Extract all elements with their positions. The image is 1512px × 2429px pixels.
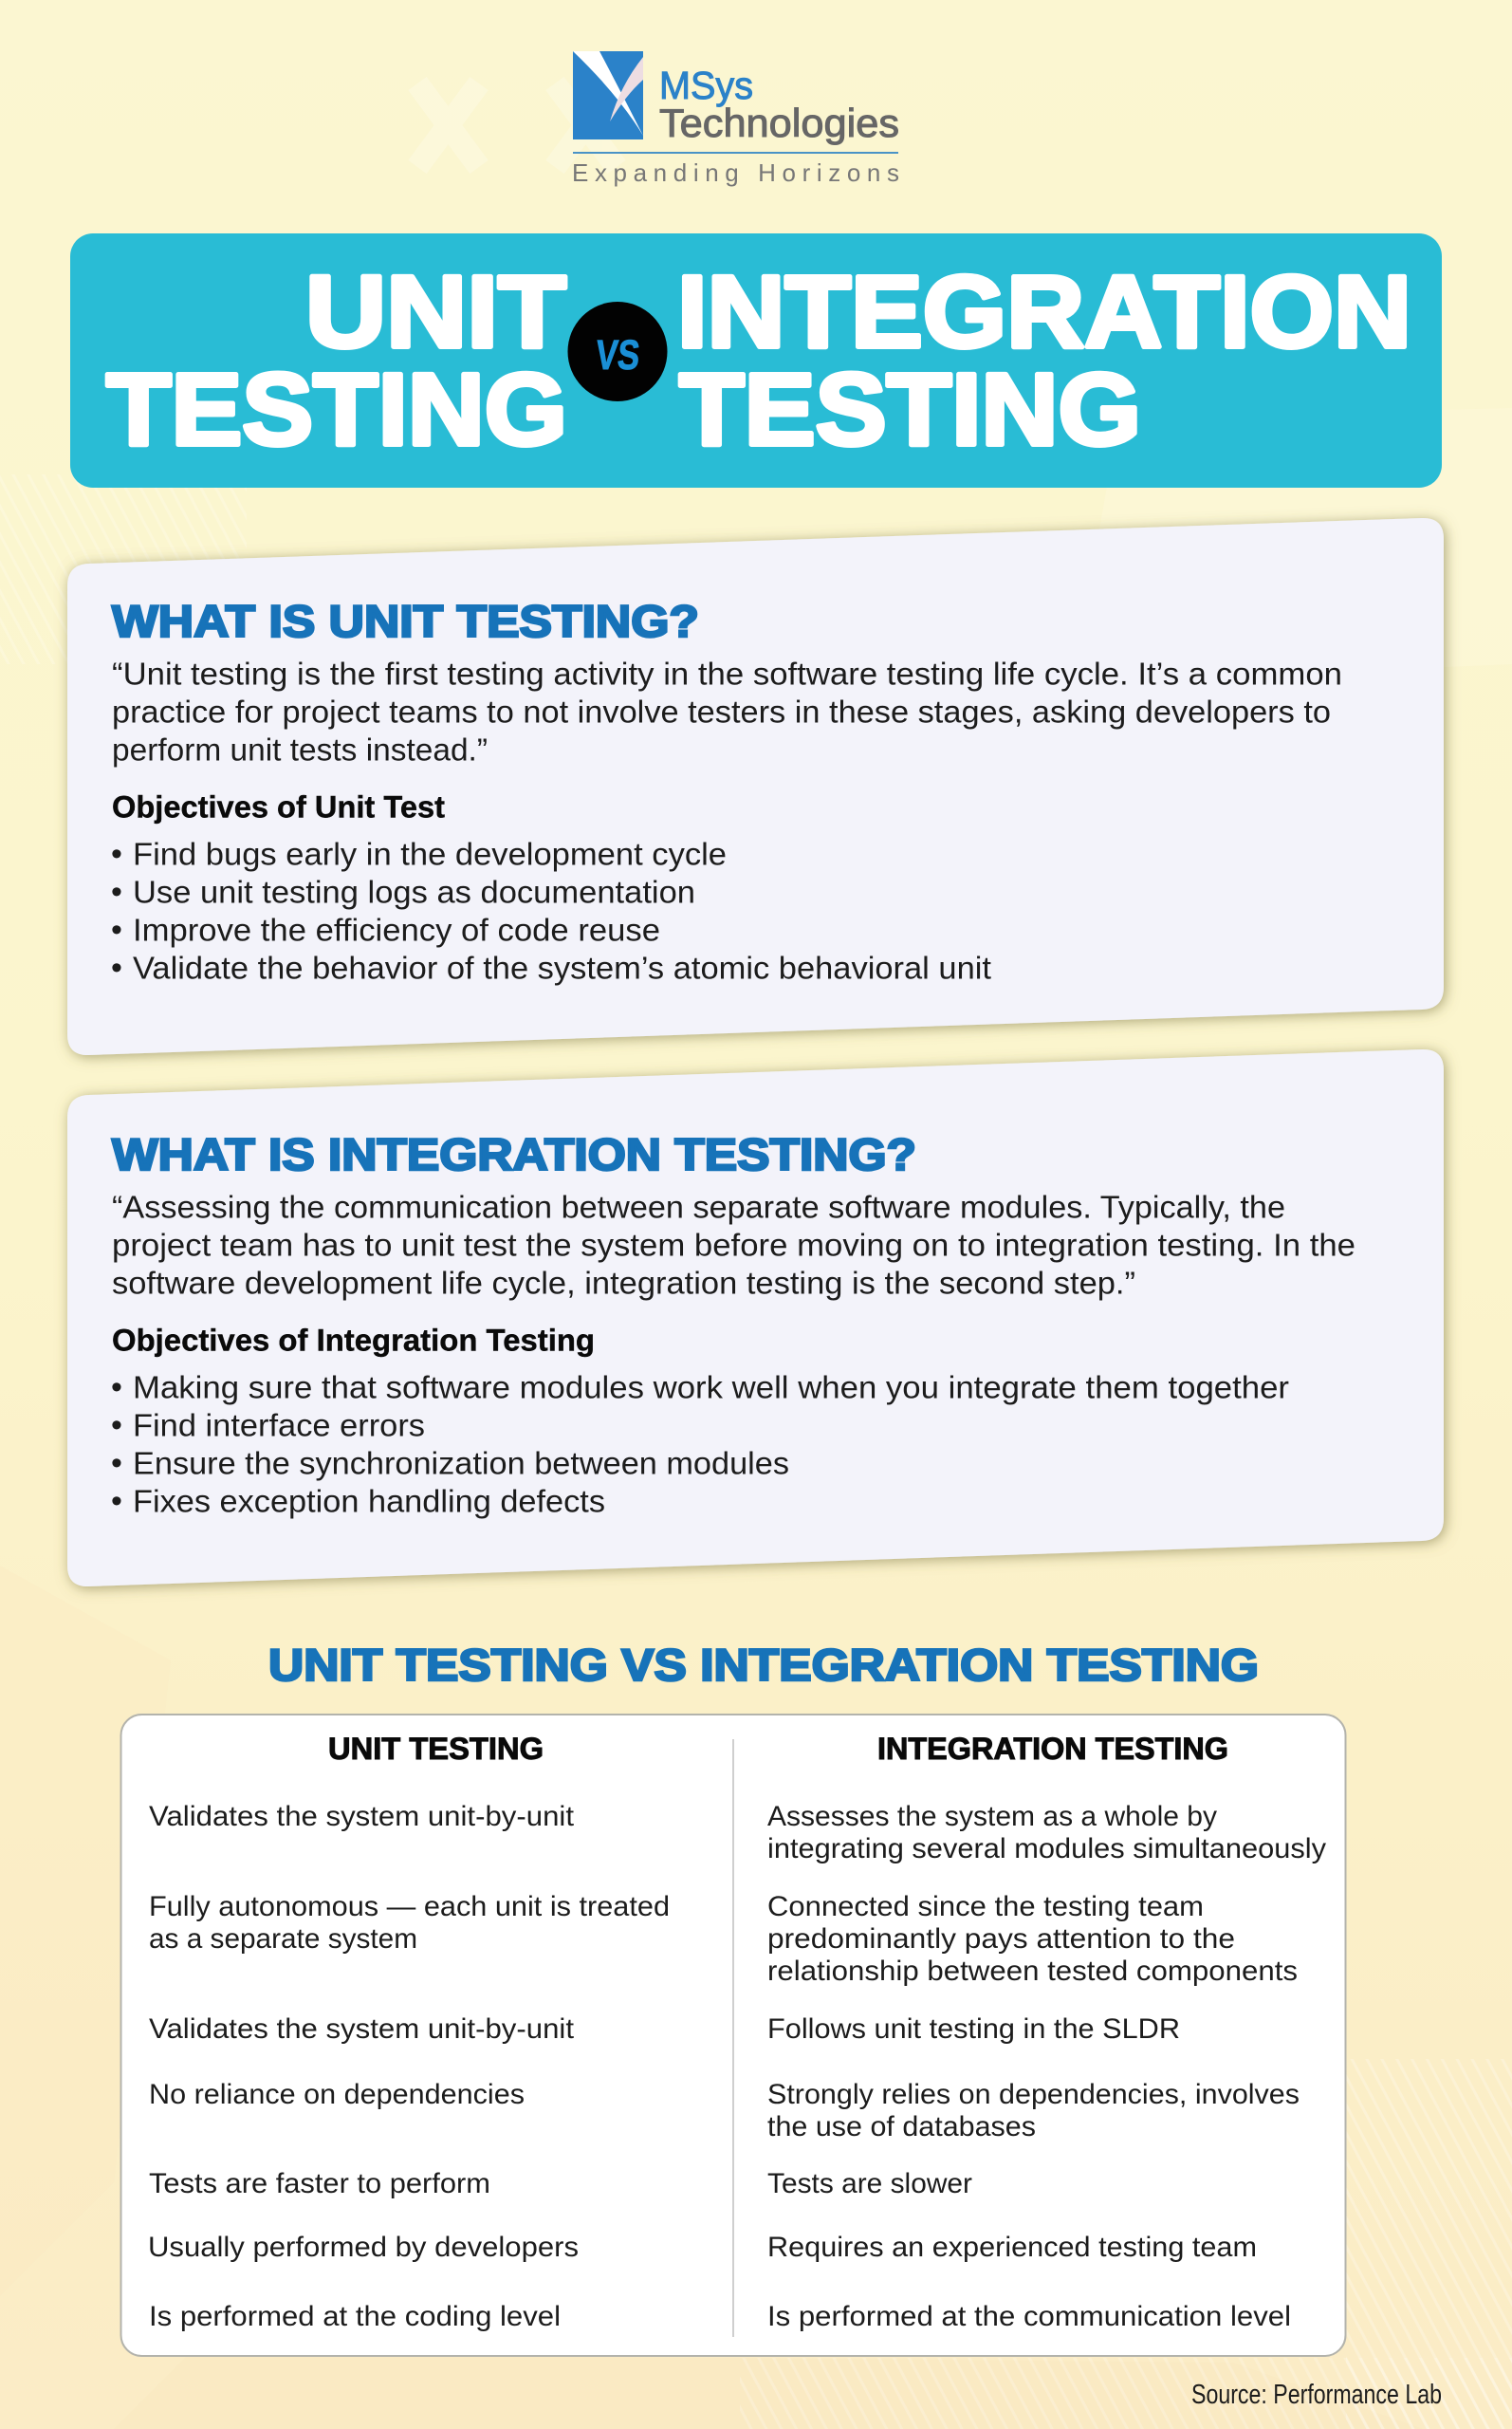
- icon: logo square with swoosh: [573, 51, 643, 139]
- column: integration testing: Is performed at the communication level: [767, 2301, 1291, 2332]
- integration test objectives list: [111, 1369, 1289, 1519]
- integration testing definition: software development life cycle, integration testing is the second step.”: [112, 1266, 1135, 1300]
- comparison table: [121, 1715, 1345, 2356]
- integration testing definition: [112, 1190, 1355, 1300]
- column: integration testing: relationship between tested components: [767, 1956, 1298, 1987]
- unit test objectives list: •: [111, 836, 122, 872]
- column: integration testing: Follows unit testing in the SLDR: [767, 2013, 1180, 2045]
- title: integration testing: TESTING: [679, 351, 1141, 467]
- column: integration testing: INTEGRATION TESTING: [877, 1732, 1228, 1766]
- vs badge: VS: [594, 332, 641, 379]
- column: unit testing: Fully autonomous — each unit is treated: [149, 1891, 670, 1922]
- unit testing definition: [112, 657, 1342, 767]
- vs badge: [567, 302, 668, 401]
- panel: what is unit testing: [67, 518, 1444, 1055]
- subheading: objectives of unit test: Objectives of Unit Test: [112, 789, 445, 824]
- unit test objectives list: Use unit testing logs as documentation: [133, 875, 695, 909]
- logo tagline: Expanding Horizons: [572, 158, 899, 187]
- integration test objectives list: •: [111, 1369, 122, 1405]
- column: unit testing: UNIT TESTING: [328, 1732, 544, 1766]
- integration testing definition: project team has to unit test the system before moving on to integration testing. In the: [112, 1228, 1355, 1262]
- title: unit testing: [106, 254, 567, 467]
- logo wordmark MSys: MSys: [659, 64, 753, 107]
- column: integration testing: [767, 1732, 1326, 2332]
- integration test objectives list: •: [111, 1407, 122, 1443]
- logo wordmark Technologies: Technologies: [659, 101, 899, 145]
- column: integration testing: Tests are slower: [767, 2168, 972, 2199]
- heading: what is integration testing: WHAT IS INTEGRATION TESTING?: [112, 1129, 916, 1179]
- unit test objectives list: Improve the efficiency of code reuse: [133, 913, 660, 947]
- panel: what is integration testing: [67, 1049, 1444, 1586]
- title banner: [70, 233, 1442, 488]
- logo divider: [573, 152, 898, 154]
- unit test objectives list: •: [111, 912, 122, 948]
- logo: MSys Technologies: [572, 51, 899, 187]
- title: unit testing: TESTING: [106, 351, 567, 467]
- column: integration testing: Strongly relies on dependencies, involves: [767, 2079, 1300, 2110]
- heading: what is unit testing: WHAT IS UNIT TESTING?: [112, 596, 699, 646]
- source credit: Source: Performance Lab: [1191, 2380, 1442, 2410]
- unit testing definition: practice for project teams to not involve testers in these stages, asking developers to: [112, 695, 1331, 729]
- integration test objectives list: •: [111, 1483, 122, 1519]
- column: integration testing: the use of databases: [767, 2111, 1036, 2142]
- title: integration testing: INTEGRATION: [677, 254, 1411, 368]
- column: unit testing: Usually performed by developers: [148, 2232, 579, 2263]
- column: integration testing: Connected since the testing team: [767, 1891, 1204, 1922]
- column: integration testing: predominantly pays attention to the: [767, 1923, 1235, 1955]
- column: unit testing: Validates the system unit-by-unit: [149, 2013, 575, 2045]
- column: unit testing: [148, 1732, 670, 2332]
- integration test objectives list: Find interface errors: [133, 1408, 425, 1442]
- column: integration testing: integrating several modules simultaneously: [767, 1833, 1326, 1864]
- unit test objectives list: [111, 836, 991, 986]
- integration test objectives list: •: [111, 1445, 122, 1481]
- unit test objectives list: Validate the behavior of the system’s atomic behavioral unit: [133, 951, 991, 985]
- integration test objectives list: Ensure the synchronization between modules: [133, 1446, 789, 1480]
- column: unit testing: Tests are faster to perform: [149, 2168, 490, 2199]
- unit test objectives list: •: [111, 950, 122, 986]
- integration test objectives list: Making sure that software modules work well when you integrate them together: [133, 1370, 1289, 1404]
- heading: comparison: UNIT TESTING VS INTEGRATION TESTING: [268, 1640, 1259, 1690]
- integration testing definition: “Assessing the communication between separate software modules. Typically, the: [112, 1190, 1285, 1224]
- title: unit testing: UNIT: [305, 254, 566, 368]
- column: unit testing: No reliance on dependencies: [149, 2079, 525, 2110]
- unit test objectives list: Find bugs early in the development cycle: [133, 837, 727, 871]
- column: integration testing: Assesses the system as a whole by: [767, 1801, 1217, 1832]
- integration test objectives list: Fixes exception handling defects: [133, 1484, 605, 1518]
- column: integration testing: Requires an experienced testing team: [767, 2232, 1257, 2263]
- unit test objectives list: •: [111, 874, 122, 910]
- subheading: objectives of integration testing: Objectives of Integration Testing: [112, 1323, 595, 1357]
- unit testing definition: “Unit testing is the first testing activity in the software testing life cycle. It’s a common: [112, 657, 1342, 691]
- title: integration testing: [677, 254, 1411, 467]
- column: unit testing: as a separate system: [149, 1923, 417, 1955]
- column: unit testing: Validates the system unit-by-unit: [149, 1801, 575, 1832]
- column: unit testing: Is performed at the coding level: [149, 2301, 561, 2332]
- unit testing definition: perform unit tests instead.”: [112, 732, 488, 767]
